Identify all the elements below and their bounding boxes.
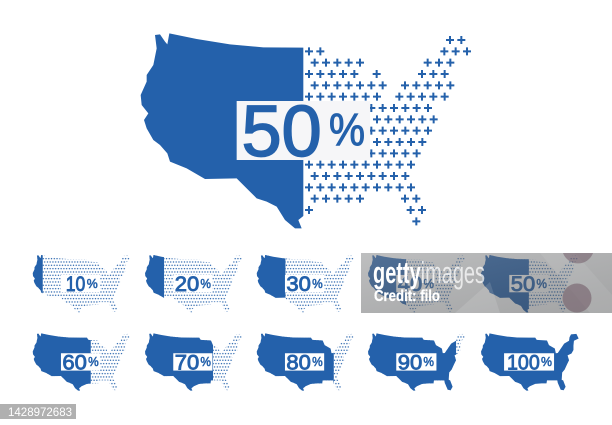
small map: 60%: % [88,354,99,369]
small map: 60%: 60 [62,351,87,374]
small map: 20%: % [200,276,211,291]
filled west half of map [140,33,304,228]
label: 50%: 50 [242,92,322,172]
main map: 50 percent [141,33,473,228]
label: 50% [242,92,365,172]
small map: 100% [481,333,579,391]
label box: 50% [237,101,370,160]
small map: 20%: 20 [175,273,199,296]
small map: 10%: 10 [66,273,85,296]
small map: 40% [368,255,464,312]
small map: 30%: % [312,276,323,291]
small map: 40%: 40 [398,273,422,296]
watermark credit: filo: Credit: filo [374,288,440,305]
small map: 90%: % [423,354,434,369]
small map: 100%: 100 [507,351,540,374]
small map: 70%: 70 [175,351,199,374]
small map: 10% [32,255,130,312]
small map: 50%: 50 [511,273,535,296]
watermark band [361,253,612,313]
watermark logo: gettyimages: gettyimages [373,255,485,290]
small map: 40%: % [423,276,434,291]
small map: 30%: 30 [286,273,311,296]
small map: 60% [32,333,130,391]
label: 50%: % [329,104,365,155]
small map: 70%: % [200,354,211,369]
small map: 50%: % [536,276,547,291]
small map: 50% [481,255,578,312]
small map: 90% [368,333,465,391]
small map: 70% [145,333,242,391]
small map: 80%: 80 [286,351,311,374]
small map: 30% [256,255,354,312]
small map: 100%: % [541,354,552,369]
small map: 80% [256,333,354,391]
small map: 80%: % [312,354,323,369]
small map: 10%: % [87,276,98,291]
small map: 20% [145,255,242,312]
image id tag [0,404,76,419]
small map: 90%: 90 [398,351,422,374]
plus sign pattern: east half of map [305,36,471,225]
image id tag: 1428972683 [8,407,72,419]
